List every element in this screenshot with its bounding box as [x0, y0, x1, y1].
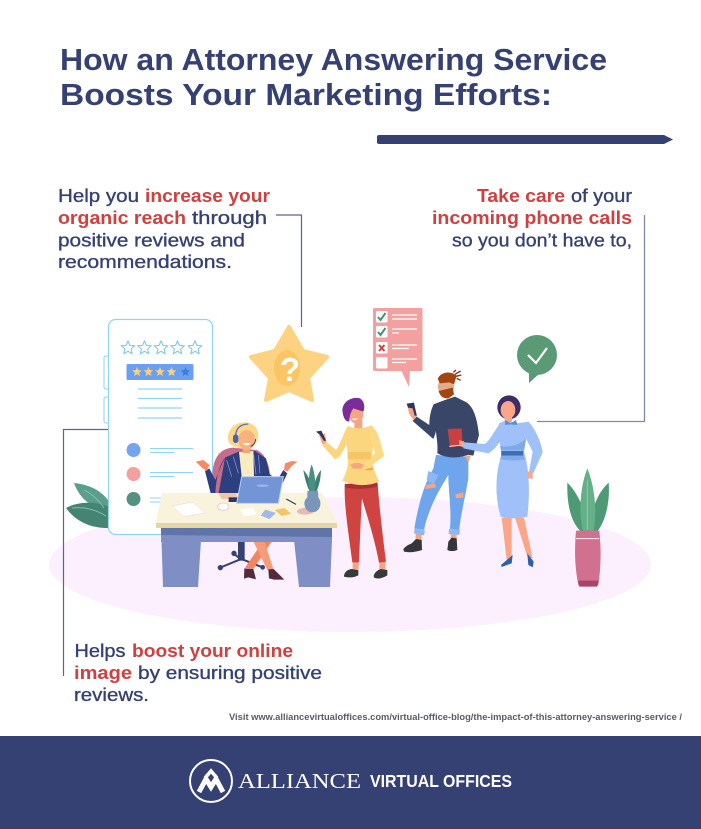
- callout text: organic reach: through: [192, 207, 267, 228]
- laptop: [237, 477, 283, 503]
- callout text: online image: Helps: [74, 640, 126, 661]
- desk items: [172, 477, 296, 519]
- icon: green check bubble: [517, 335, 557, 383]
- connector: phone calls to woman: [537, 215, 644, 422]
- icon: question star: ?: [280, 351, 300, 388]
- chair base: [218, 540, 265, 570]
- chair back: [213, 448, 270, 495]
- callout text: organic reach: Help you: [58, 185, 139, 206]
- callout text: online image: by ensuring positive: [138, 662, 322, 683]
- callout text: phone calls: incoming phone calls: [432, 207, 632, 228]
- right floor plant: [567, 468, 609, 587]
- man with notebook and phone: [403, 370, 479, 552]
- callout text: online image: boost your online: [132, 640, 293, 661]
- callout text: organic reach: recommendations.: [58, 251, 232, 272]
- crossed legs: [244, 540, 284, 580]
- title: How an Attorney Answering Service: [60, 42, 607, 77]
- callout text: phone calls: of your: [571, 185, 632, 206]
- brand name: [238, 769, 512, 793]
- face and headset: [233, 424, 256, 453]
- background floor ellipse: [49, 497, 651, 632]
- source url: Visit www.alliancevirtualoffices.com/virtual-office-blog/the-impact-of-this-attorney-answering-service /: [229, 712, 682, 723]
- reviewer rows: [126, 443, 140, 457]
- callout text: organic reach: organic reach: [58, 207, 186, 228]
- icon: checklist bubble: [373, 308, 422, 387]
- brand name: ALLIANCE: [238, 769, 361, 793]
- icon: question star: [251, 327, 327, 400]
- footer band: [0, 736, 701, 829]
- callout text: online image: reviews.: [74, 684, 149, 705]
- logo: [190, 760, 232, 802]
- panel: review card: [104, 320, 212, 534]
- title: [60, 42, 607, 112]
- hands: [196, 460, 298, 472]
- title arrow bar: [377, 135, 673, 144]
- icon: leaves behind panel: [66, 483, 112, 528]
- brand name: VIRTUAL OFFICES: [370, 771, 512, 791]
- callout text: phone calls: Take care: [477, 185, 565, 206]
- outlined stars: [121, 341, 202, 354]
- desk plant in vase: [297, 464, 321, 515]
- jacket: [205, 451, 287, 495]
- desk: [156, 477, 337, 587]
- woman in blue dress: [459, 395, 543, 567]
- connector: organic reach to star: [276, 215, 302, 327]
- callout text: phone calls: [432, 185, 632, 250]
- callout text: phone calls: so you don’t have to,: [452, 230, 632, 250]
- review lines: [138, 389, 182, 418]
- receptionist at desk: [196, 422, 298, 580]
- callout text: organic reach: [58, 185, 270, 272]
- callout text: organic reach: positive reviews and: [58, 230, 245, 250]
- callout text: organic reach: increase your: [145, 185, 270, 206]
- connector: online image to panel: [64, 430, 108, 676]
- hair: [228, 422, 258, 448]
- woman in yellow sweater: [316, 398, 387, 578]
- title: Boosts Your Marketing Efforts:: [60, 77, 552, 112]
- rating bar: [126, 364, 194, 380]
- callout text: online image: image: [74, 662, 132, 683]
- callout text: online image: [74, 640, 322, 705]
- tabs: [104, 356, 108, 423]
